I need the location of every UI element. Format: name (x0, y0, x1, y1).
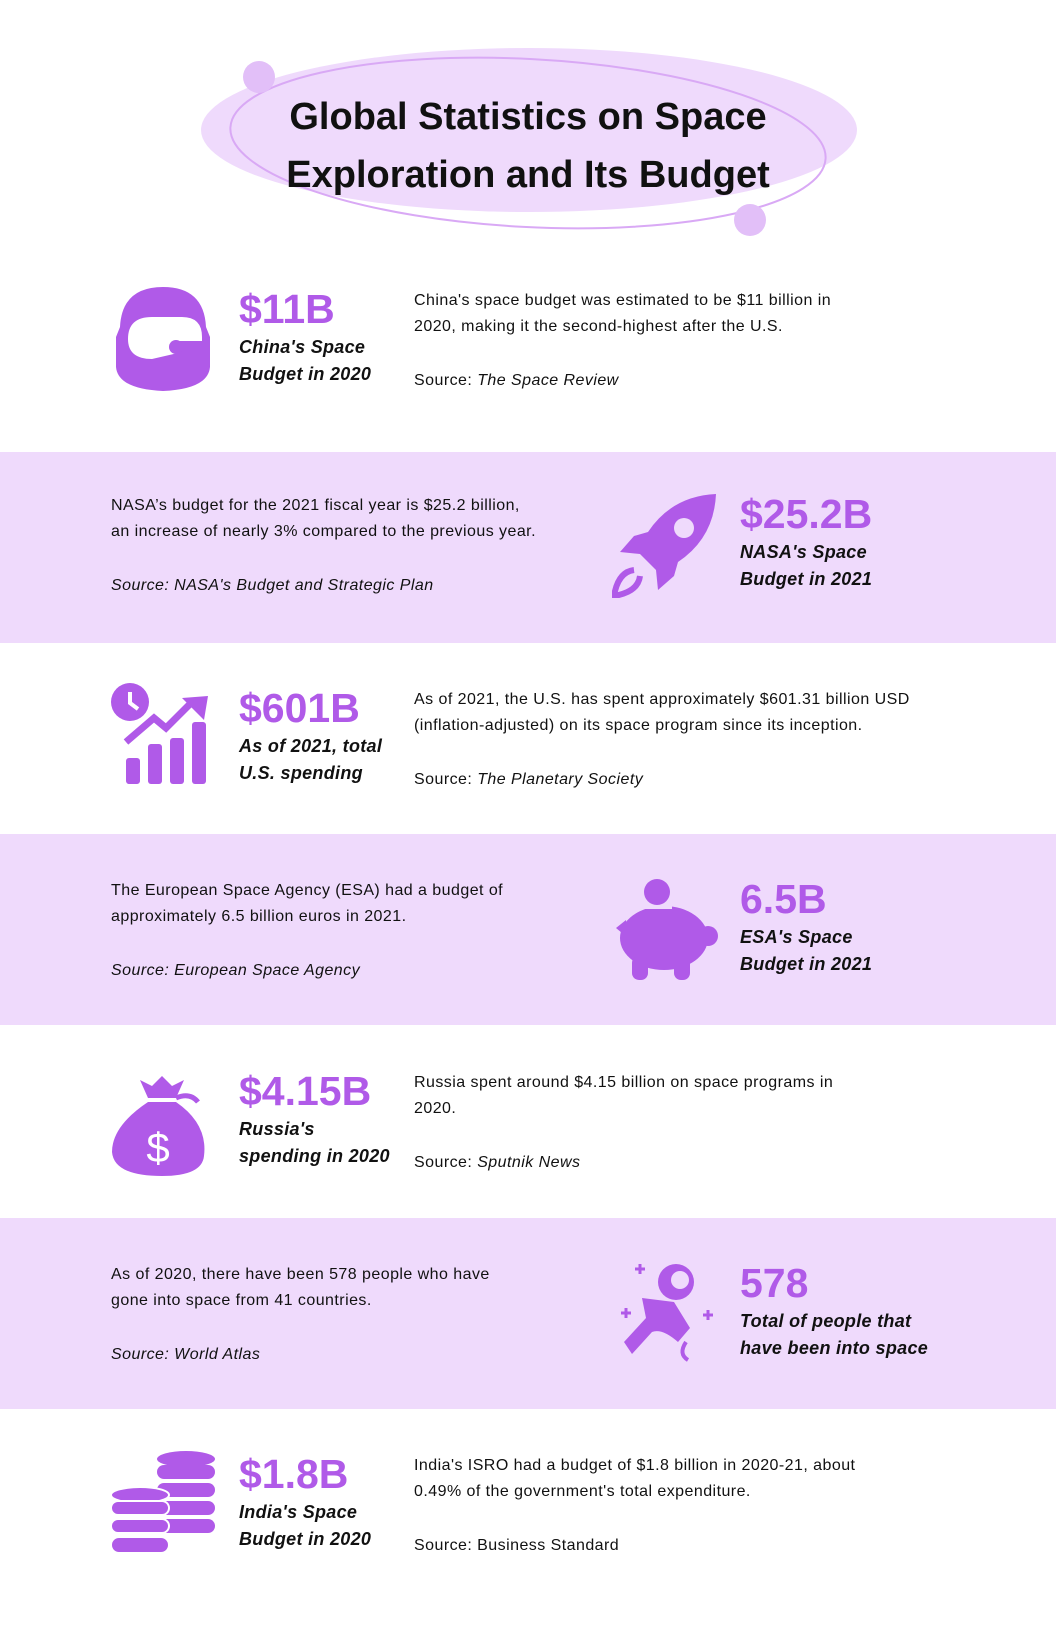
description: NASA’s budget for the 2021 fiscal year is $25.2 billion, (111, 497, 520, 514)
row: US total (111, 683, 910, 788)
description: India's ISRO had a budget of $1.8 billion in 2020-21, about (414, 1457, 855, 1474)
description (414, 1457, 855, 1500)
stat: $1.8B (239, 1451, 348, 1497)
band: NASA: Source: NASA's Budget and Strategic Plan (111, 577, 434, 594)
description: gone into space from 41 countries. (111, 1292, 372, 1308)
description (111, 882, 503, 924)
title: Exploration and Its Budget (286, 154, 770, 196)
row: China: Budget in 2020 (239, 364, 371, 384)
band: ESA: ESA's Space (740, 927, 853, 947)
row: Russia: Russia's (239, 1119, 315, 1139)
icon: coins (112, 1451, 215, 1552)
title: Global Statistics on Space (289, 96, 767, 138)
band: people in space: Total of people that (740, 1311, 911, 1331)
row: China: China's Space (239, 337, 365, 357)
icon: helmet (116, 287, 210, 391)
description (414, 691, 910, 734)
row: China: Source: The Space Review (414, 372, 619, 389)
band: NASA: Budget in 2021 (740, 569, 872, 589)
row: China (116, 286, 831, 391)
band: ESA: Budget in 2021 (740, 954, 872, 974)
description: 2020. (414, 1100, 456, 1116)
description: As of 2021, the U.S. has spent approximately $601.31 billion USD (414, 691, 910, 708)
band: ESA (0, 834, 1056, 1025)
row: Russia (112, 1068, 833, 1176)
icon: chart (111, 683, 208, 784)
row: US total: Source: The Planetary Society (414, 771, 643, 788)
description: 2020, making it the second-highest after the U.S. (414, 318, 783, 334)
description (111, 497, 536, 540)
stat: 578 (740, 1260, 808, 1306)
stat: $601B (239, 685, 360, 731)
row: US total: U.S. spending (239, 763, 363, 783)
description: China's space budget was estimated to be $11 billion in (414, 292, 831, 309)
title decoration (201, 48, 857, 236)
stat: $25.2B (740, 491, 872, 537)
icon: astronaut (621, 1264, 713, 1362)
description: (inflation-adjusted) on its space program since its inception. (414, 716, 863, 734)
band: people in space: Source: World Atlas (111, 1346, 260, 1363)
title (286, 96, 770, 196)
row: India: Budget in 2020 (239, 1529, 371, 1549)
stat: $4.15B (239, 1068, 371, 1114)
description (111, 1266, 490, 1308)
band: people in space: have been into space (740, 1338, 928, 1358)
band: ESA: Source: European Space Agency (111, 962, 360, 979)
icon: rocket (612, 494, 716, 598)
row: US total: As of 2021, total (239, 736, 382, 756)
description (414, 292, 831, 334)
icon: piggy bank (616, 879, 718, 980)
row: Russia: spending in 2020 (239, 1146, 390, 1166)
row: India: Source: Business Standard (414, 1537, 619, 1554)
row: India: India's Space (239, 1502, 357, 1522)
stat: $11B (239, 286, 335, 332)
band: NASA: NASA's Space (740, 542, 867, 562)
icon: money bag (112, 1076, 204, 1176)
description: 0.49% of the government's total expenditure. (414, 1482, 751, 1500)
description: The European Space Agency (ESA) had a budget of (111, 882, 503, 899)
description: Russia spent around $4.15 billion on space programs in (414, 1074, 833, 1091)
description: an increase of nearly 3% compared to the previous year. (111, 522, 536, 540)
row: India (112, 1451, 855, 1554)
row: Russia: Source: Sputnik News (414, 1154, 580, 1171)
icon: money bag: $ (146, 1124, 170, 1171)
stat: 6.5B (740, 876, 827, 922)
band: people in space (0, 1218, 1056, 1409)
description: approximately 6.5 billion euros in 2021. (111, 908, 406, 924)
description: As of 2020, there have been 578 people who have (111, 1266, 490, 1283)
description (414, 1074, 833, 1116)
band: NASA (0, 452, 1056, 643)
